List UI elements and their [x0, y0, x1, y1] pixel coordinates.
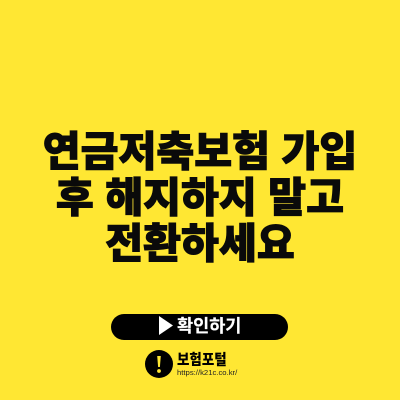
title: 후 해지하지 말고 — [56, 175, 344, 221]
logo: insurance portal — [145, 350, 238, 378]
button: confirm — [111, 314, 288, 340]
icon: exclamation circle — [145, 350, 173, 378]
brand name: 보험포털 — [177, 351, 227, 368]
title — [43, 129, 357, 267]
icon: play triangle — [159, 316, 173, 335]
title: 전환하세요 — [105, 221, 295, 267]
button label: 확인하기 — [177, 316, 241, 336]
brand url: https://k21c.co.kr/ — [177, 368, 237, 377]
title: 연금저축보험 가입 — [43, 129, 357, 175]
